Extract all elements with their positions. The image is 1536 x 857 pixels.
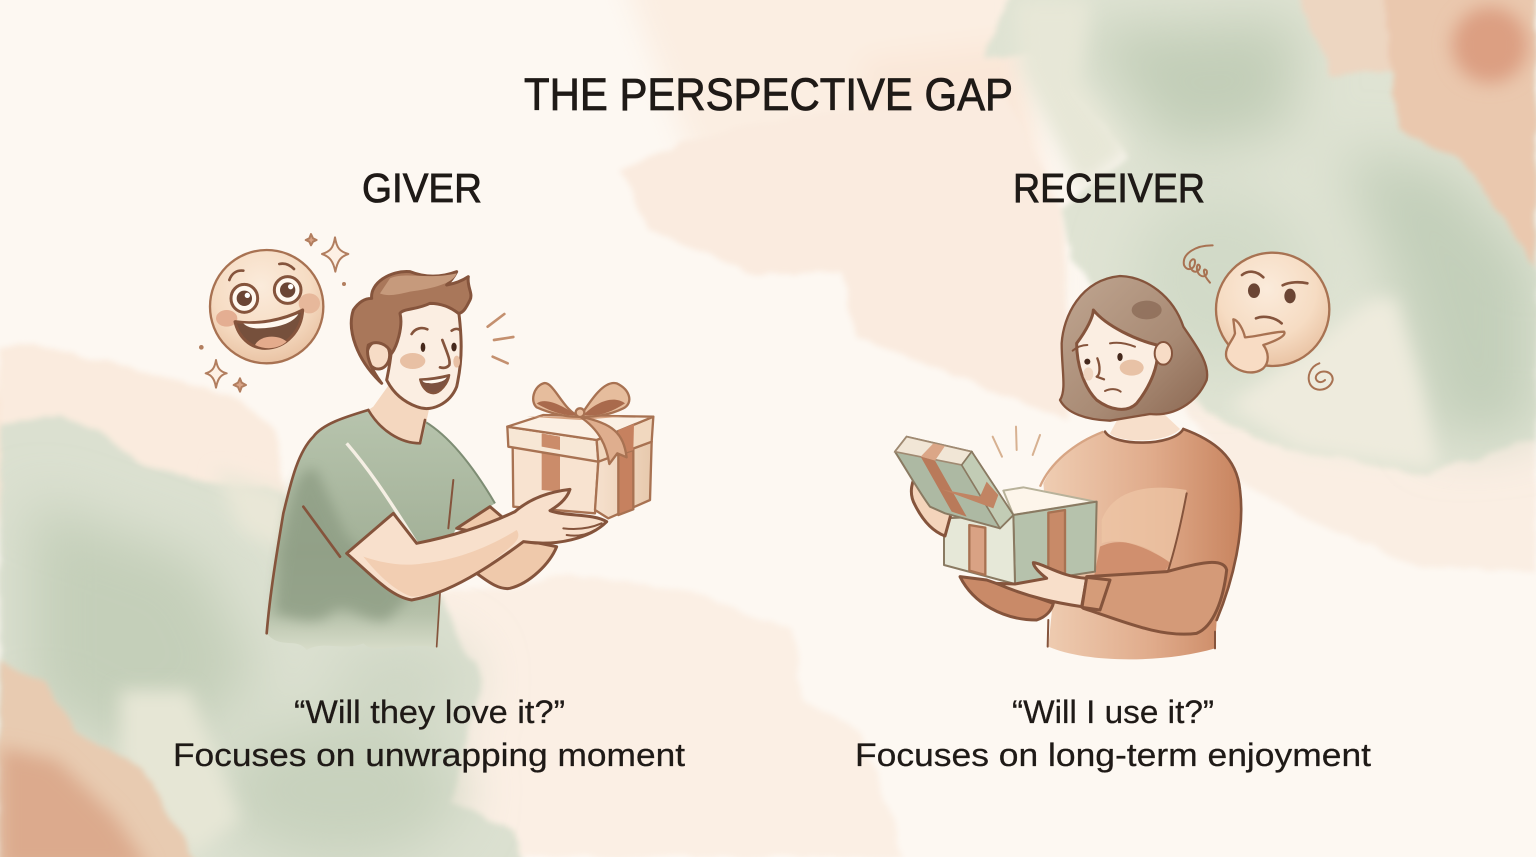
icon: sparkles: [200, 234, 348, 392]
gift box: [507, 383, 653, 518]
gift bow: [527, 383, 629, 464]
caption: giver: [173, 694, 685, 773]
man: neck: [368, 383, 430, 443]
open gift box: [944, 487, 1097, 584]
left hand holding lid: [911, 472, 957, 536]
man: hair: [351, 272, 471, 383]
box lid: [895, 437, 1013, 528]
man: far arm: [457, 507, 557, 589]
right hand under box: [997, 563, 1110, 610]
open box: front faces: [1013, 502, 1097, 584]
woman: sleeve: [1083, 562, 1227, 634]
title: THE PERSPECTIVE GAP: [524, 69, 1013, 120]
woman: neck: [1110, 412, 1180, 440]
receiver illustration: [895, 245, 1333, 659]
caption: giver: “Will they love it?”: [294, 694, 565, 730]
man: head and face: [351, 272, 471, 408]
caption: receiver: Focuses on long-term enjoyment: [855, 737, 1371, 773]
glow lines: [993, 427, 1040, 457]
caption: receiver: [855, 694, 1371, 773]
icon: happy emoji: [210, 250, 323, 363]
excitement lines: [488, 314, 513, 363]
heading: giver: GIVER: [362, 165, 482, 211]
icon: thinking emoji: [1216, 253, 1329, 372]
giver illustration: [200, 234, 653, 650]
caption: receiver: “Will I use it?”: [1012, 694, 1214, 730]
heading: receiver: RECEIVER: [1013, 165, 1205, 211]
man: torso and t-shirt: [267, 410, 495, 650]
woman: head: [1060, 276, 1207, 421]
caption: giver: Focuses on unwrapping moment: [173, 737, 685, 773]
icon: scribble spirals: [1184, 245, 1333, 390]
woman: sweater: [960, 429, 1241, 659]
man: near arm and hand: [347, 489, 607, 600]
